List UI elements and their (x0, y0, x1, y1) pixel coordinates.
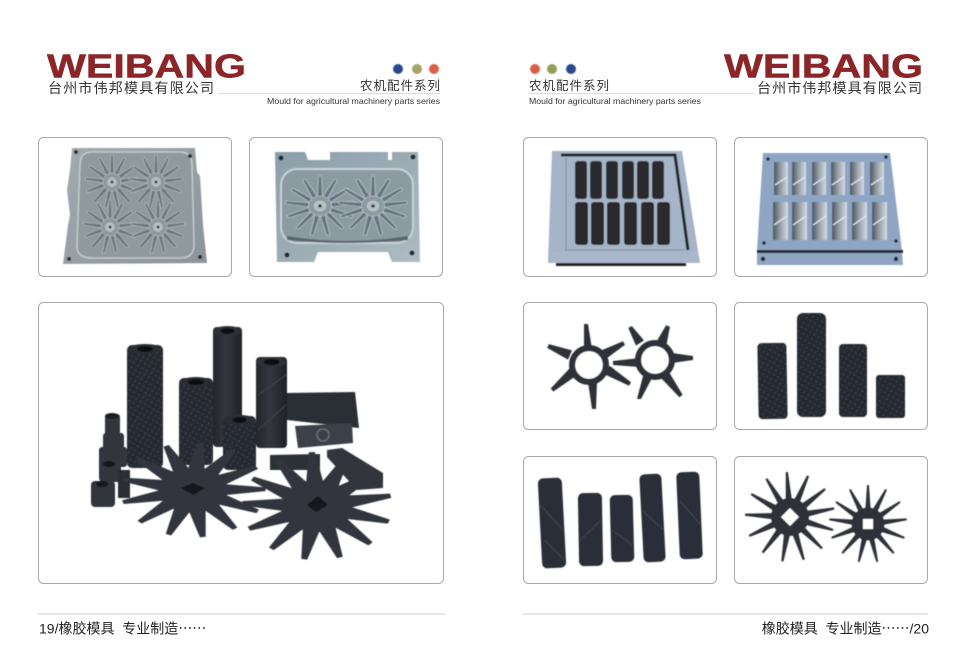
right page header (529, 48, 923, 106)
studded cylinder tall (127, 344, 163, 468)
studded cylinder short (223, 415, 256, 470)
studded roller 1 (757, 343, 788, 419)
studded roller 3 (839, 344, 867, 417)
stepped bushings (91, 413, 130, 507)
spiral roller 5 (676, 472, 703, 559)
blade ring left (547, 324, 631, 409)
star wheel small (829, 485, 907, 563)
panel: rubber parts assortment (38, 302, 444, 584)
left page header (47, 48, 440, 106)
spiral roller 4 (639, 473, 666, 562)
panel: two-star mould (250, 138, 442, 276)
series title right: 农机配件系列 (529, 79, 609, 93)
spiral roller 2 (578, 493, 603, 566)
company name left: 台州市伟邦模具有限公司 (48, 80, 214, 96)
panel: four-star mould (38, 138, 232, 276)
studded cylinder middle (179, 377, 213, 465)
spiral roller 3 (610, 495, 634, 562)
spiral cylinder tall (213, 326, 242, 447)
colour dots right (530, 64, 576, 74)
page number and slogan left: 19/橡胶模具 专业制造…… (39, 618, 206, 638)
WEIBANG logo left: WEIBANG (47, 48, 246, 86)
blade ring right (613, 325, 693, 399)
series subtitle left: Mould for agricultural machinery parts series (267, 96, 440, 106)
large star wheel left (113, 438, 273, 542)
colour dots left (393, 64, 439, 74)
studded roller 2 (797, 313, 826, 417)
spiral roller 1 (538, 477, 566, 569)
panel: six-blade ring parts (524, 302, 716, 430)
panel: star wheels (734, 456, 928, 584)
series divider right (529, 93, 754, 94)
flat rubber sheets (270, 392, 383, 490)
studded roller 4 (876, 375, 905, 418)
panel: studded rollers (734, 302, 928, 430)
large star wheel right (236, 448, 398, 564)
panel: black roller inserts mould (524, 138, 716, 276)
spiral cylinder right (256, 357, 287, 448)
series divider left (218, 93, 440, 94)
series subtitle right: Mould for agricultural machinery parts series (529, 96, 701, 106)
page number and slogan right: 橡胶模具 专业制造……/20 (762, 618, 929, 638)
WEIBANG logo right: WEIBANG (724, 48, 923, 86)
panel: spiral rollers (524, 456, 716, 584)
company name right: 台州市伟邦模具有限公司 (757, 80, 922, 96)
star wheel large (742, 469, 838, 564)
panel: spiral roller mould (734, 138, 928, 276)
series title left: 农机配件系列 (360, 79, 440, 93)
